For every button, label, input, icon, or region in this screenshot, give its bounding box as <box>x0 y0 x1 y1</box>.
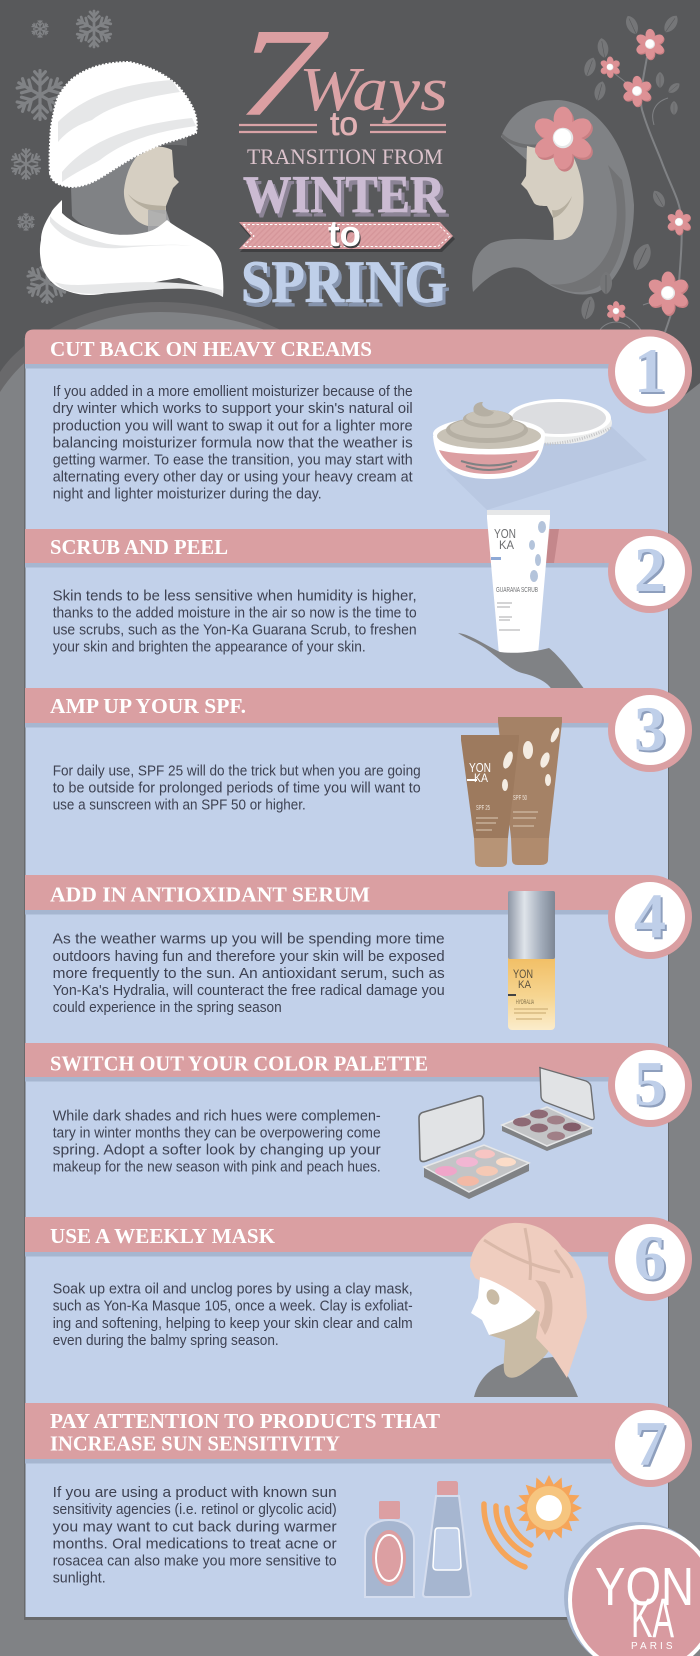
icon: tall bottle <box>423 1481 471 1597</box>
band with number badge <box>25 330 692 414</box>
step 7 <box>25 1403 692 1597</box>
title: spring: SPRING <box>244 253 450 319</box>
body text: spring. Adopt a softer look by changing up your <box>53 1143 381 1159</box>
band with number badge: 1 <box>634 335 666 406</box>
band with number badge <box>25 688 692 772</box>
body text <box>53 1109 381 1176</box>
icon: guarana scrub tube on hand: GUARANA SCRUB <box>496 585 538 594</box>
band with number badge: 3 <box>636 695 668 766</box>
body text: balancing moisturizer formula now that the weather is <box>53 435 413 451</box>
logo badge: Yon-Ka Paris <box>564 1522 700 1656</box>
band with number badge <box>25 1403 692 1487</box>
band with number badge <box>25 1217 692 1301</box>
body text <box>53 932 445 1016</box>
body text: night and lighter moisturizer during the day. <box>53 487 322 503</box>
body text: makeup for the new season with pink and peach hues. <box>53 1160 381 1176</box>
illustration: woman in winter hat and scarf <box>40 62 223 297</box>
icon: sunscreen tubes: YON <box>469 760 491 775</box>
icon: hydralia serum bottle <box>508 891 555 1030</box>
step 6 <box>25 1217 692 1397</box>
icon: cream jar and lid <box>433 399 647 510</box>
icon: sunscreen tubes <box>461 717 562 867</box>
step 3 <box>25 688 692 867</box>
main panel background <box>24 338 669 1620</box>
body text: thanks to the added moisture in the air so now is the time to <box>53 605 417 621</box>
icon: guarana scrub tube on hand: KA <box>499 538 514 552</box>
body text: Yon-Ka's Hydralia, will counteract the free radical damage you <box>53 983 445 999</box>
body text <box>53 384 413 503</box>
body text: more frequently to the sun. An antioxidant serum, such as <box>53 966 445 982</box>
body text: could experience in the spring season <box>53 1000 282 1016</box>
band with number badge: 7 <box>636 1410 668 1481</box>
heading: ADD IN ANTIOXIDANT SERUM <box>50 883 370 907</box>
illustration: spring vine and flowers <box>579 13 693 332</box>
body text: If you are using a product with known sun <box>53 1485 337 1501</box>
heading <box>50 1409 440 1456</box>
band with number badge <box>25 1043 692 1127</box>
illustration: woman with flower in hair <box>472 100 634 295</box>
band with number badge: 2 <box>636 536 668 607</box>
body text: rosacea can also make you more sensitive to <box>53 1553 337 1569</box>
step 2 <box>25 510 692 690</box>
snowflakes <box>11 11 112 302</box>
title: transition from: TRANSITION FROM <box>247 144 443 169</box>
body text: such as Yon-Ka Masque 105, once a week. Clay is exfoliat- <box>53 1299 413 1315</box>
icon: hydralia serum bottle: HYDRALIA <box>516 1000 534 1006</box>
band with number badge <box>25 875 692 959</box>
heading: INCREASE SUN SENSITIVITY <box>50 1432 340 1456</box>
ribbon: to: to <box>328 213 361 254</box>
body text: Skin tends to be less sensitive when humidity is higher, <box>53 588 417 604</box>
body text <box>53 588 417 656</box>
icon: sunscreen tubes: SPF 25 <box>476 803 490 812</box>
body text: months. Oral medications to treat acne or <box>53 1536 337 1552</box>
band with number badge: 4 <box>634 880 666 951</box>
heading: SWITCH OUT YOUR COLOR PALETTE <box>50 1052 428 1076</box>
band with number badge: 2 <box>634 534 666 605</box>
step 5 <box>25 1043 692 1199</box>
body text: getting warmer. To ease the transition, you may start with <box>53 452 413 468</box>
icon: sun with rays <box>484 1475 582 1567</box>
band with number badge: 3 <box>634 693 666 764</box>
body text: Soak up extra oil and unclog pores by using a clay mask, <box>53 1282 413 1298</box>
body text: use scrubs, such as the Yon-Ka Guarana Scrub, to freshen <box>53 623 417 639</box>
ribbon: to: to <box>329 215 362 256</box>
title: Ways: Ways <box>299 56 448 124</box>
icon: makeup palettes <box>419 1068 594 1199</box>
band with number badge: 1 <box>636 337 668 408</box>
band with number badge: 4 <box>636 882 668 953</box>
body text: If you added in a more emollient moisturizer because of the <box>53 384 413 400</box>
palette: pink shades <box>419 1096 529 1199</box>
heading: CUT BACK ON HEAVY CREAMS <box>50 337 372 361</box>
title <box>238 4 455 319</box>
heading: PAY ATTENTION TO PRODUCTS THAT <box>50 1409 440 1433</box>
body text: production you will want to swap it out for a lighter more <box>53 418 413 434</box>
ribbon: to <box>239 213 455 256</box>
scarf <box>40 200 223 297</box>
heading: AMP UP YOUR SPF. <box>50 694 246 718</box>
body text: to be outside for prolonged periods of time you will want to <box>53 780 421 796</box>
body text: you may want to cut back during warmer <box>53 1519 337 1535</box>
body text: sunlight. <box>53 1570 106 1586</box>
band with number badge: 5 <box>634 1048 666 1119</box>
body text: As the weather warms up you will be spending more time <box>53 932 445 948</box>
band with number badge: 6 <box>636 1224 668 1295</box>
band with number badge: 6 <box>634 1222 666 1293</box>
title: to with rules: to <box>330 105 358 142</box>
body text: use a sunscreen with an SPF 50 or higher. <box>53 797 306 813</box>
heading: SCRUB AND PEEL <box>50 535 228 559</box>
body text: your skin and brighten the appearance of your skin. <box>53 640 366 656</box>
body text <box>53 1485 337 1586</box>
fur hat <box>50 62 197 187</box>
icon: woman with towel and clay mask <box>470 1223 587 1397</box>
band with number badge <box>25 529 692 613</box>
step 4 <box>25 875 692 1030</box>
body text <box>53 1282 413 1349</box>
icon: hydralia serum bottle: KA <box>518 979 532 991</box>
icon: hydralia serum bottle: YON <box>513 967 533 981</box>
body text: even during the balmy spring season. <box>53 1333 279 1349</box>
icon: guarana scrub tube on hand: YON <box>494 526 516 541</box>
logo badge: Yon-Ka Paris: PARIS <box>631 1641 675 1652</box>
body text: dry winter which works to support your skin's natural oil <box>53 401 413 417</box>
icon: guarana scrub tube on hand <box>458 510 585 690</box>
body text: sensitivity agencies (i.e. retinol or glycolic acid) <box>53 1502 337 1518</box>
body text: While dark shades and rich hues were complemen- <box>53 1109 381 1125</box>
body text: tary in winter months they can be overpowering come <box>53 1126 381 1142</box>
heading: USE A WEEKLY MASK <box>50 1224 276 1248</box>
body text: For daily use, SPF 25 will do the trick but when you are going <box>53 763 421 779</box>
title: winter: WINTER <box>246 170 449 228</box>
icon: sunscreen tubes: KA <box>474 771 488 785</box>
title: 7: 7 <box>238 4 329 141</box>
icon: round bottle <box>365 1501 414 1597</box>
band with number badge: 5 <box>636 1050 668 1121</box>
icon: sunscreen tubes: SPF 50 <box>513 793 527 802</box>
title: winter: WINTER <box>243 166 446 224</box>
title: spring: SPRING <box>241 249 447 315</box>
step 1 <box>25 330 692 510</box>
body text: outdoors having fun and therefore your skin will be exposed <box>53 949 445 965</box>
band with number badge: 7 <box>634 1408 666 1479</box>
body text: alternating every other day or using your heavy cream at <box>53 470 413 486</box>
body text: ing and softening, helping to keep your skin clear and calm <box>53 1316 413 1332</box>
palette: dark shades <box>502 1068 594 1151</box>
title: to with rules <box>239 105 446 142</box>
body text <box>53 763 421 813</box>
